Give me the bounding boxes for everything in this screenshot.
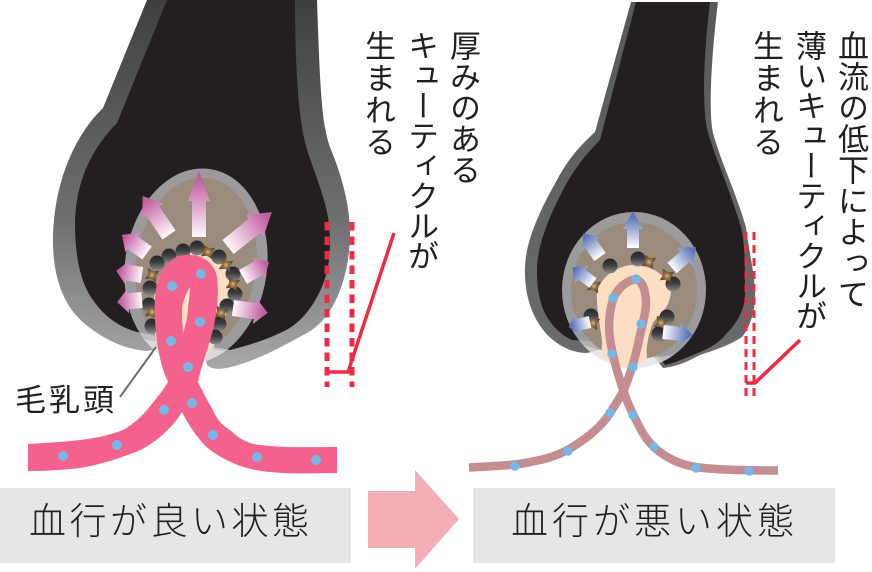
text: thin cuticle column 1: 血流の低下によって bbox=[833, 30, 868, 309]
brown matrix bbox=[571, 222, 697, 360]
blue growth arrows bbox=[566, 211, 704, 346]
outer cuticle band (thin) bbox=[525, 2, 755, 368]
left hair follicle: good blood flow bbox=[28, 0, 350, 473]
label: dermal papilla: 毛乳頭 bbox=[15, 383, 117, 418]
cream dermal papilla bbox=[154, 252, 234, 356]
leader line to dermal papilla label bbox=[120, 347, 156, 397]
text: thick cuticle column 3: 生まれる bbox=[360, 30, 395, 158]
pale overlay at bulb opening bbox=[583, 345, 674, 368]
blood cells bbox=[58, 269, 321, 465]
melanocyte beads bbox=[142, 240, 242, 344]
melanocyte beads bbox=[584, 252, 680, 342]
text: thin cuticle column 3: 生まれる bbox=[748, 30, 783, 158]
arrow between states bbox=[368, 470, 459, 569]
text: thick cuticle column 1: 厚みのある bbox=[445, 30, 480, 185]
thin blood vessel bbox=[469, 280, 778, 470]
caption text: poor state: 血行が悪い状態 bbox=[511, 501, 798, 542]
pink growth arrows bbox=[114, 171, 281, 326]
grey bulb ring bbox=[112, 159, 280, 373]
star cells bbox=[145, 245, 240, 320]
caption panel: good state bbox=[0, 488, 351, 563]
left cuticle marker: red dashed lines and leader bbox=[327, 222, 394, 387]
caption panel: poor state bbox=[473, 488, 835, 563]
blood cells bbox=[510, 274, 754, 476]
outer cuticle band (thick) bbox=[53, 0, 350, 369]
cream dermal papilla bbox=[597, 265, 671, 369]
grey bulb ring bbox=[562, 212, 706, 368]
text: thin cuticle column 2: 薄いキューティクルが bbox=[791, 30, 826, 330]
pink blood vessel (thick) bbox=[28, 255, 337, 473]
black hair body bbox=[75, 0, 330, 350]
right hair follicle: poor blood flow bbox=[469, 2, 778, 476]
pale overlay at bulb opening bbox=[144, 338, 225, 362]
brown matrix bbox=[124, 170, 268, 360]
right cuticle marker: red dashed lines and leader bbox=[746, 232, 800, 398]
black hair body bbox=[537, 2, 745, 365]
caption text: good state: 血行が良い状態 bbox=[29, 501, 312, 542]
cream slit in vessel loop bbox=[182, 287, 190, 333]
text: thick cuticle column 2: キューティクルが bbox=[403, 30, 438, 270]
star cells bbox=[586, 255, 674, 330]
